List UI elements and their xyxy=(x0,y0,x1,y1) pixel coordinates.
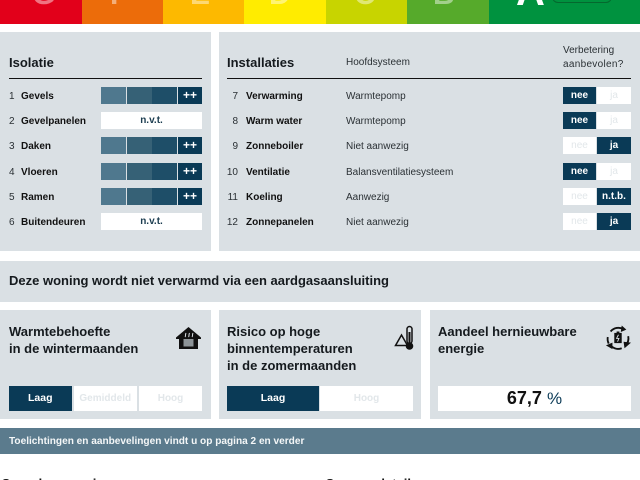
panel: isolatie xyxy=(0,32,211,251)
row 11 koeling: Aanwezig xyxy=(346,192,389,202)
row 8 warm water: Warm water xyxy=(246,116,302,127)
heading: warmtebehoefte: in de wintermaanden xyxy=(9,341,138,356)
heading: risico: in de zomermaanden xyxy=(227,358,356,373)
row 11 koeling: 11 xyxy=(228,192,238,202)
energy label colour bar xyxy=(0,0,640,24)
row 12 zonnepanelen: 12 xyxy=(227,217,238,228)
row 8 warm water: nee xyxy=(571,115,588,126)
row 4 vloeren: 4 xyxy=(9,166,15,178)
row 2 gevelpanelen: Gevelpanelen xyxy=(21,116,86,127)
panel: aardgas statement xyxy=(0,261,640,302)
row 9 zonneboiler xyxy=(232,137,631,154)
row 7 verwarming xyxy=(232,87,631,104)
row 8 warm water xyxy=(232,112,631,129)
heading: aandeel: energie xyxy=(438,341,484,356)
row 7 verwarming: ja xyxy=(610,90,618,101)
row 11 koeling: Koeling xyxy=(246,192,283,202)
row 6 buitendeuren: 6 xyxy=(9,217,15,228)
row 5 ramen: 5 xyxy=(9,192,15,202)
scale: laag hoog: Hoog xyxy=(354,392,379,404)
row 6 buitendeuren xyxy=(9,213,202,230)
row 1 gevels: 1 xyxy=(9,91,15,102)
heading: warmtebehoefte xyxy=(9,324,138,356)
banner text: Toelichtingen en aanbevelingen vindt u op pagina 2 en verder xyxy=(9,436,304,447)
column heading: verbetering aanbevolen: aanbevolen? xyxy=(563,58,624,70)
outlined badge xyxy=(552,0,612,3)
row 11 koeling xyxy=(228,188,631,205)
class G segment xyxy=(0,0,82,24)
row 12 zonnepanelen: ja xyxy=(610,216,618,227)
row 5 ramen: ++ xyxy=(183,188,197,202)
row 12 zonnepanelen: Niet aanwezig xyxy=(346,217,409,228)
row 9 zonneboiler: nee xyxy=(571,140,588,151)
row 5 ramen xyxy=(9,188,202,205)
row 7 verwarming: 7 xyxy=(232,91,238,102)
class D segment xyxy=(244,0,326,24)
column heading: verbetering aanbevolen xyxy=(563,44,624,70)
panel: risico op hoge binnentemperaturen xyxy=(219,310,421,419)
heading: risico: binnentemperaturen xyxy=(227,341,353,356)
scale: laag hoog: Laag xyxy=(261,392,285,404)
row 6 buitendeuren: n.v.t. xyxy=(140,216,163,227)
row 10 ventilatie: 10 xyxy=(227,166,238,178)
row 4 vloeren xyxy=(9,163,202,180)
heading: warmtebehoefte: Warmtebehoefte xyxy=(9,324,110,339)
row 9 zonneboiler: ja xyxy=(610,140,618,151)
scale: laag gemiddeld hoog xyxy=(9,386,202,411)
column heading: verbetering aanbevolen: Verbetering xyxy=(563,44,614,56)
heading: installaties: Installaties xyxy=(227,54,294,70)
row 7 verwarming: Warmtepomp xyxy=(346,91,406,102)
class C segment xyxy=(326,0,407,24)
row 7 verwarming: Verwarming xyxy=(246,91,303,102)
row 2 gevelpanelen xyxy=(9,112,202,129)
row 3 daken xyxy=(9,137,202,154)
panel: aandeel hernieuwbare energie xyxy=(430,310,640,419)
heading: risico: Risico op hoge xyxy=(227,324,320,339)
row 3 daken: 3 xyxy=(9,141,15,152)
row 10 ventilatie: Balansventilatiesysteem xyxy=(346,166,453,178)
row 11 koeling: n.t.b. xyxy=(602,190,626,202)
row 9 zonneboiler: 9 xyxy=(232,141,238,152)
row 2 gevelpanelen: n.v.t. xyxy=(140,115,163,126)
row 2 gevelpanelen: 2 xyxy=(9,116,15,127)
row 10 ventilatie: Ventilatie xyxy=(246,166,290,178)
value: 67,7 %: 67,7 % xyxy=(507,388,562,408)
row 10 ventilatie xyxy=(227,163,631,180)
class F segment xyxy=(82,0,163,24)
row 3 daken: ++ xyxy=(183,138,197,152)
row 10 ventilatie: nee xyxy=(571,166,588,176)
row 9 zonneboiler: Niet aanwezig xyxy=(346,141,409,152)
scale: laag gemiddeld hoog: Hoog xyxy=(158,392,183,404)
row 1 gevels xyxy=(9,87,202,104)
row 6 buitendeuren: Buitendeuren xyxy=(21,217,85,228)
scale: laag gemiddeld hoog: Gemiddeld xyxy=(79,392,131,404)
row 8 warm water: Warmtepomp xyxy=(346,116,406,127)
class B segment xyxy=(407,0,489,24)
banner: toelichtingen xyxy=(0,428,640,454)
icon: house with heating xyxy=(176,327,201,349)
icon: thermometer with warning xyxy=(394,326,414,350)
class E segment xyxy=(163,0,244,24)
row 12 zonnepanelen: Zonnepanelen xyxy=(246,217,314,228)
scale: laag hoog xyxy=(227,386,413,411)
heading: aandeel xyxy=(438,324,577,356)
row 12 zonnepanelen: nee xyxy=(571,216,588,227)
row 8 warm water: ja xyxy=(610,115,618,126)
class A segment xyxy=(489,0,640,24)
icon: battery with recycle arrows xyxy=(606,326,631,350)
row 1 gevels: Gevels xyxy=(21,91,54,102)
row 5 ramen: Ramen xyxy=(21,192,54,202)
value: 67,7 % xyxy=(438,386,631,411)
statement text: Deze woning wordt niet verwarmd via een aardgasaansluiting xyxy=(9,273,389,288)
row 11 koeling: nee xyxy=(571,190,588,202)
column heading: hoofdsysteem: Hoofdsysteem xyxy=(346,57,410,68)
row 12 zonnepanelen xyxy=(227,213,631,230)
heading: aandeel: Aandeel hernieuwbare xyxy=(438,324,577,339)
panel: installaties xyxy=(219,32,640,251)
panel: warmtebehoefte xyxy=(0,310,211,419)
row 3 daken: Daken xyxy=(21,141,51,152)
row 8 warm water: 8 xyxy=(232,116,238,127)
scale: laag gemiddeld hoog: Laag xyxy=(28,392,52,404)
row 4 vloeren: Vloeren xyxy=(21,166,58,178)
heading: risico xyxy=(227,324,356,373)
row 7 verwarming: nee xyxy=(571,90,588,101)
heading: isolatie: Isolatie xyxy=(9,54,54,70)
row 1 gevels: ++ xyxy=(183,88,197,102)
row 4 vloeren: ++ xyxy=(183,164,197,178)
row 9 zonneboiler: Zonneboiler xyxy=(246,141,303,152)
row 10 ventilatie: ja xyxy=(610,166,618,176)
